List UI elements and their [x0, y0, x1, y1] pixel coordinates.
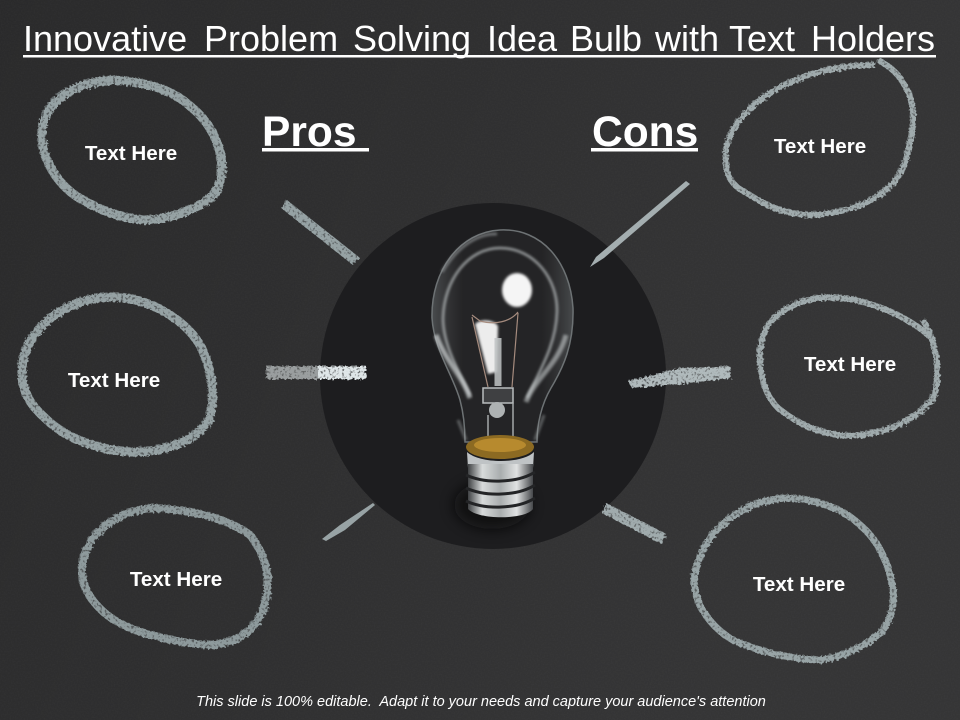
title: Bulb: [570, 18, 642, 59]
text holder: top right: [726, 60, 913, 215]
text holder: top left: [42, 80, 222, 220]
text holder: bottom left: [82, 508, 268, 645]
title: Holders: [811, 18, 935, 59]
title: with: [654, 18, 719, 59]
dark circle behind bulb: [320, 203, 666, 549]
chalk ray: lower left: [322, 503, 375, 541]
icon: light bulb: [432, 230, 573, 529]
chalk ray: upper left: [284, 204, 356, 261]
heading: Cons: Cons: [592, 109, 698, 156]
title: Innovative: [23, 18, 187, 59]
text holder: middle left: Text Here: [68, 369, 160, 392]
text holder: middle right: Text Here: [804, 353, 896, 376]
title: Solving: [353, 18, 471, 59]
text holder: middle right: [760, 297, 937, 435]
title: Text: [729, 18, 795, 59]
title: [23, 18, 936, 59]
chalk ray: middle left: [266, 366, 366, 379]
chalk ray: middle right: [628, 366, 731, 388]
title: Idea: [487, 18, 558, 59]
text holder: top left: Text Here: [85, 142, 177, 165]
text holder: middle left: [22, 297, 212, 452]
chalk ray: upper right: [590, 181, 690, 267]
title: Problem: [204, 18, 338, 59]
chalk ray: lower right: [604, 508, 664, 539]
text holder: bottom right: Text Here: [753, 573, 845, 596]
footer note: This slide is 100% editable. Adapt it to your needs and capture your audience's attention: [196, 694, 766, 710]
text holder: top right: Text Here: [774, 135, 866, 158]
text holder: bottom right: [694, 498, 893, 660]
heading: Pros: Pros: [262, 109, 356, 156]
text holder: bottom left: Text Here: [130, 568, 222, 591]
